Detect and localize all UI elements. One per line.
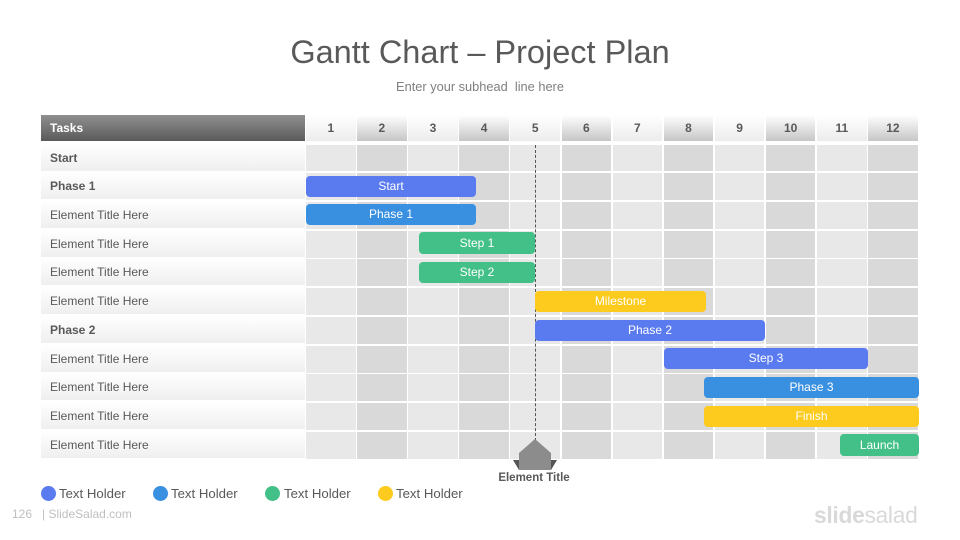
title: Gantt Chart – Project Plan: [290, 34, 670, 70]
legend: Text Holder: [284, 486, 351, 501]
header: tasks: Tasks: [50, 121, 83, 135]
header: month columns: 1: [327, 121, 334, 135]
subtitle: Enter your subhead line here: [396, 79, 564, 94]
task labels: Start: [50, 151, 77, 165]
header: month columns: 11: [835, 121, 848, 135]
bar: Phase 3: [704, 377, 919, 398]
legend: Text Holder: [396, 486, 463, 501]
bar: Finish: [704, 406, 919, 427]
bar: Milestone: Milestone: [595, 294, 646, 308]
milestone dashed line: [535, 145, 536, 441]
header: month columns: 5: [532, 121, 539, 135]
bar: Step 2: [419, 262, 535, 283]
task labels: [41, 151, 305, 458]
bar: Launch: Launch: [860, 438, 899, 452]
task labels: Element Title Here: [50, 352, 149, 366]
milestone label: Element Title: [498, 472, 570, 484]
header: month columns: 6: [583, 121, 590, 135]
panel: gantt grid columns: [306, 145, 918, 459]
task labels: Element Title Here: [50, 409, 149, 423]
bar: Phase 3: Phase 3: [789, 380, 834, 394]
task labels: Element Title Here: [50, 237, 149, 251]
bar: Step 3: Step 3: [749, 351, 783, 365]
legend: Text Holder: [59, 486, 126, 501]
header: month columns: 4: [481, 121, 487, 135]
header: month columns: 2: [379, 121, 385, 135]
logo text: slidesalad: [814, 502, 917, 528]
task labels: Element Title Here: [50, 380, 149, 394]
task labels: Element Title Here: [50, 294, 149, 308]
icon: milestone marker: [513, 439, 557, 470]
header: month columns: 12: [886, 121, 900, 135]
bar: Phase 2: Phase 2: [628, 323, 672, 337]
header: month columns: 8: [685, 121, 692, 135]
bar: Finish: Finish: [795, 409, 828, 423]
bar: Phase 2: [535, 320, 765, 341]
task labels: Element Title Here: [50, 438, 149, 452]
legend: [41, 486, 463, 501]
header: month columns: [306, 119, 918, 141]
bar: Step 3: [664, 348, 868, 369]
bar: Milestone: [535, 291, 706, 312]
bar: Launch: [840, 434, 919, 456]
header: month columns: 3: [430, 121, 436, 135]
bar: Phase 1: [306, 204, 476, 225]
footer page number: 126 | SlideSalad.com: [12, 507, 132, 521]
legend: Text Holder: [171, 486, 238, 501]
task labels: Phase 1: [50, 179, 95, 193]
task labels: Element Title Here: [50, 265, 149, 279]
header: month columns: 10: [784, 121, 797, 135]
header: month columns: 9: [736, 121, 743, 135]
bar: Step 1: [419, 232, 535, 254]
header: tasks: [41, 115, 305, 141]
bar: Start: Start: [378, 179, 404, 193]
task labels: Element Title Here: [50, 208, 149, 222]
bar: Step 1: Step 1: [460, 236, 494, 250]
bar: Phase 1: Phase 1: [369, 207, 413, 221]
bar: Step 2: Step 2: [460, 265, 494, 279]
bar: Start: [306, 176, 476, 197]
task labels: Phase 2: [50, 323, 95, 337]
header: month columns: 7: [634, 121, 641, 135]
